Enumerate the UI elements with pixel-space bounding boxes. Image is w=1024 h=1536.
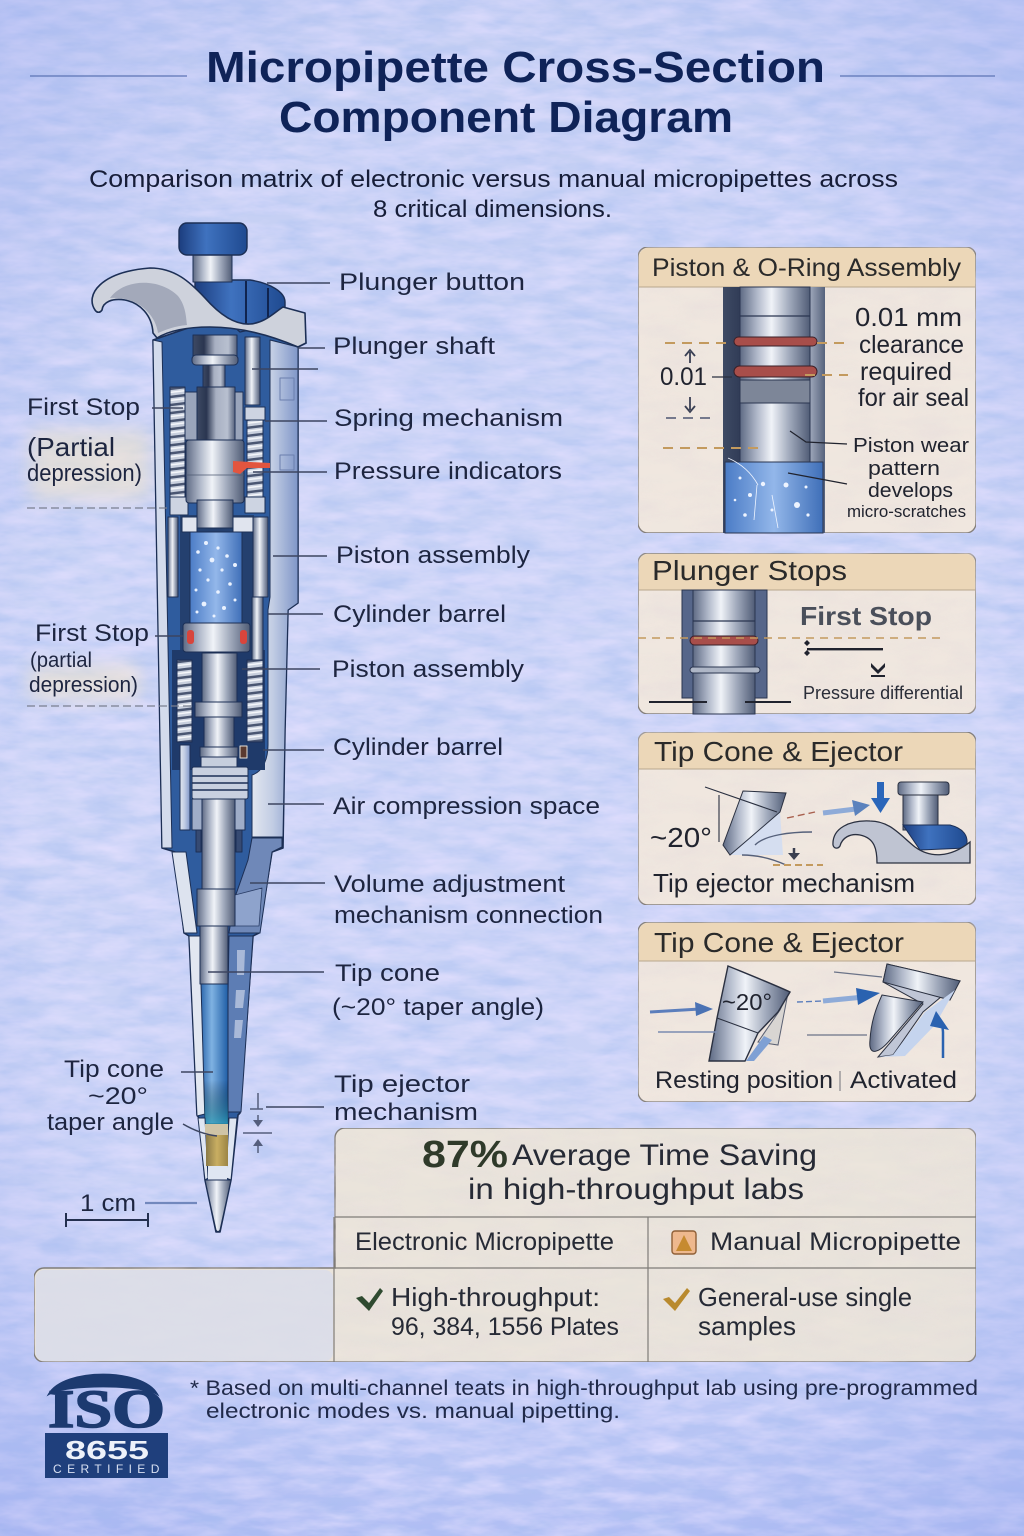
hook shading	[110, 283, 187, 333]
plunger rod	[245, 337, 260, 405]
left labels: (partial	[30, 649, 92, 672]
lower right spring	[247, 660, 263, 742]
footnote: * Based on multi-channel teats in high-throughput lab using pre-programmed	[190, 1377, 978, 1400]
piston rod	[202, 653, 237, 703]
left wall	[153, 340, 172, 848]
wear note: micro-scratches	[847, 502, 966, 521]
plunger illustration	[649, 590, 791, 714]
leader lines	[152, 283, 330, 1136]
right labels: Tip ejector	[334, 1071, 470, 1098]
left labels: First Stop	[35, 620, 149, 647]
subtitle	[89, 166, 898, 223]
rod block	[195, 702, 242, 717]
title: Micropipette Cross-Section	[206, 43, 825, 92]
upper collar	[193, 335, 237, 357]
lower left nose	[172, 852, 197, 933]
panel: tip cone and ejector mechanism	[638, 732, 976, 905]
cell: manual: samples	[698, 1311, 796, 1341]
position captions: Resting position	[655, 1067, 833, 1094]
certified plate	[45, 1433, 168, 1478]
narrow shaft	[203, 365, 225, 387]
left labels: depression)	[27, 460, 142, 487]
left labels: ~20°	[88, 1083, 148, 1110]
scale bar: 1 cm: 1 cm	[80, 1190, 136, 1217]
left spring	[170, 387, 185, 497]
plate caption: CERTIFIED	[53, 1462, 161, 1476]
stat headline: 87%	[422, 1134, 508, 1176]
panel header	[639, 248, 975, 287]
panel: piston and o-ring assembly	[638, 247, 976, 533]
inner dark frame	[180, 515, 254, 655]
empty left cell tint	[36, 1270, 333, 1361]
panel: plunger stops	[638, 553, 976, 714]
lower right nose	[229, 838, 282, 933]
right labels: Cylinder barrel	[333, 734, 503, 761]
activated cone	[870, 964, 960, 1057]
left labels: depression)	[29, 672, 138, 697]
right labels	[332, 269, 603, 1126]
heading: Tip Cone & Ejector	[654, 927, 904, 958]
lower left bar	[168, 517, 178, 597]
flange	[192, 355, 238, 365]
position captions: Activated	[850, 1067, 957, 1094]
o-ring block	[183, 623, 250, 652]
footnote	[190, 1377, 978, 1423]
right labels: Plunger button	[339, 269, 525, 296]
cell: manual	[663, 1282, 912, 1341]
glow behind left notes	[30, 430, 150, 700]
heading: Piston & O-Ring Assembly	[652, 254, 962, 282]
clearance note: required	[860, 358, 952, 386]
right labels: Spring mechanism	[334, 405, 563, 432]
right labels: Cylinder barrel	[333, 601, 506, 628]
ridged stack	[192, 767, 248, 799]
lower right bar	[253, 517, 268, 597]
footnote: electronic modes vs. manual pipetting.	[206, 1400, 620, 1423]
title: Component Diagram	[279, 93, 733, 142]
right labels: mechanism connection	[334, 902, 603, 929]
first stop dashed line	[638, 637, 945, 639]
ejection arrows	[773, 782, 890, 865]
angle label: ~20°	[650, 822, 712, 853]
position captions	[655, 1067, 957, 1094]
stop marker	[804, 640, 885, 677]
tip cone sketch	[705, 787, 812, 865]
side blocks	[185, 392, 243, 440]
micropipette cross-section	[92, 223, 306, 1232]
side posts	[192, 799, 245, 830]
big cylinder	[186, 440, 244, 503]
lower pins	[196, 830, 242, 852]
left sleeve	[189, 936, 205, 1116]
table background	[34, 1128, 976, 1362]
gold band	[205, 1124, 228, 1180]
tip cone blue	[201, 984, 228, 1124]
comparison table	[34, 1128, 976, 1362]
title	[30, 43, 995, 142]
glass chamber	[190, 532, 242, 623]
cell: electronic	[356, 1282, 619, 1341]
plunger stem	[193, 250, 232, 282]
cell: manual: General-use single	[698, 1282, 912, 1312]
left labels: (Partial	[27, 432, 115, 462]
right labels: (~20° taper angle)	[332, 994, 544, 1021]
scale bar: 1 cm	[66, 1190, 197, 1227]
indicator clip	[240, 746, 247, 758]
first stop label: First Stop	[800, 601, 932, 631]
wear note	[788, 431, 969, 521]
subtitle: 8 critical dimensions.	[373, 196, 612, 223]
right labels: Air compression space	[333, 793, 600, 820]
wider sleeve	[197, 889, 235, 926]
panel header	[639, 923, 975, 961]
clearance note: for air seal	[858, 384, 969, 412]
clearance dashes	[663, 343, 848, 448]
finger hook	[92, 268, 306, 347]
main shaft	[202, 799, 235, 889]
right labels: Tip cone	[335, 960, 440, 987]
clearance value	[660, 350, 732, 412]
heading: Tip Cone & Ejector	[654, 736, 903, 767]
left labels	[27, 394, 174, 1136]
right labels: Plunger shaft	[333, 333, 495, 360]
dome ribs	[246, 281, 268, 325]
neck	[201, 757, 237, 768]
column head: electronic: Electronic Micropipette	[355, 1228, 614, 1256]
resting cone	[709, 966, 790, 1061]
tip sheath	[198, 1118, 237, 1180]
piston illustration	[723, 287, 825, 533]
stat headline: in high-throughput labs	[468, 1173, 804, 1206]
cell: electronic: High-throughput:	[391, 1282, 600, 1312]
left labels: taper angle	[47, 1109, 174, 1136]
upper cylinder	[197, 387, 235, 440]
right labels: Piston assembly	[336, 542, 530, 569]
left labels: First Stop	[27, 394, 140, 421]
stat headline	[422, 1134, 817, 1206]
cell: electronic: 96, 384, 1556 Plates	[391, 1313, 619, 1341]
panel: tip cone and ejector positions	[638, 922, 976, 1102]
activation arrows	[797, 972, 949, 1058]
rod lower	[204, 717, 234, 747]
pointed end	[205, 1180, 231, 1232]
heading: Plunger Stops	[652, 555, 847, 586]
right labels: Volume adjustment	[334, 871, 565, 898]
globe	[49, 1374, 157, 1394]
ISO 8655 certified badge	[45, 1374, 168, 1478]
tip cone teal	[203, 1080, 228, 1124]
table grid	[334, 1217, 976, 1362]
lower left rail	[180, 745, 190, 830]
left labels: Tip cone	[64, 1056, 164, 1083]
body shell	[153, 300, 306, 1232]
mechanism caption: Tip ejector mechanism	[653, 868, 915, 898]
stop dashed lines	[27, 508, 195, 706]
plunger button	[179, 223, 247, 255]
connector	[197, 500, 233, 528]
spring caps	[170, 407, 265, 515]
wear note: pattern	[868, 458, 940, 480]
resting angle: ~20°	[722, 989, 772, 1015]
right stem	[252, 597, 263, 660]
nose highlight	[230, 888, 262, 926]
wear note: Piston wear	[853, 435, 969, 457]
rod collar	[200, 747, 238, 757]
subtitle: Comparison matrix of electronic versus manual micropipettes across	[89, 166, 898, 193]
pressure indicator	[233, 461, 270, 474]
tip cone upper	[200, 926, 228, 984]
brackets	[182, 517, 253, 532]
right labels: Pressure indicators	[334, 458, 562, 485]
wear note: develops	[868, 480, 953, 502]
right outer panel	[252, 340, 298, 837]
clearance note: clearance	[859, 331, 964, 359]
ejector button sketch	[833, 782, 970, 863]
right spring	[247, 420, 263, 500]
clearance note	[855, 302, 969, 412]
clearance value: 0.01	[660, 363, 707, 391]
column head: manual: Manual Micropipette	[710, 1228, 961, 1256]
plunger dome	[195, 280, 285, 332]
clearance note: 0.01 mm	[855, 302, 962, 332]
tip ejector dimension arrows	[243, 1093, 272, 1153]
sleeve marks	[234, 950, 245, 1038]
right sleeve	[226, 936, 253, 1112]
right labels: Piston assembly	[332, 656, 524, 683]
push arrow	[650, 1002, 717, 1032]
right labels: mechanism	[334, 1099, 478, 1126]
plate number: 8655	[65, 1435, 149, 1465]
panel header	[639, 554, 975, 590]
pressure label: Pressure differential	[803, 683, 963, 703]
stat headline: Average Time Saving	[512, 1139, 817, 1172]
ISO lettering: ISO	[48, 1379, 165, 1439]
lower left spring	[177, 660, 192, 742]
panel header	[639, 733, 975, 769]
window marks	[280, 378, 294, 470]
